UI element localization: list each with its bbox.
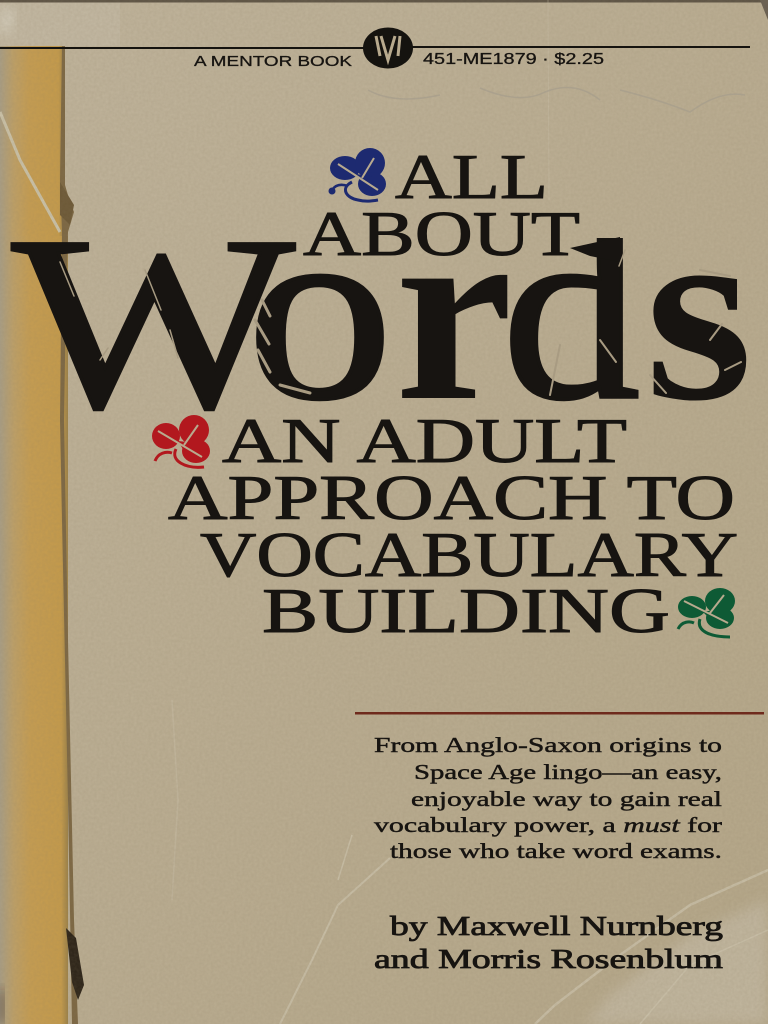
top rule [0, 46, 750, 49]
subtitle [168, 405, 738, 646]
title: Words: d [502, 167, 640, 453]
icon: blue clover [328, 148, 386, 201]
yellow spine strip [0, 46, 84, 1024]
subtitle: VOCABULARY [200, 519, 738, 590]
subtitle: APPROACH TO [168, 462, 735, 533]
title: Words: r [395, 167, 513, 455]
title: all about [303, 141, 580, 269]
subtitle: AN ADULT [222, 405, 627, 476]
title: Words: s [645, 167, 753, 455]
publisher line right: catalogue number and price: 451-ME1879 · $2.25 [423, 51, 604, 68]
blurb: Space Age lingo—an easy, [414, 760, 722, 784]
blurb: those who take word exams. [390, 839, 722, 863]
icon: mentor logo [363, 28, 413, 68]
icon: red clover [152, 415, 210, 467]
wear marks on the title [60, 250, 741, 395]
authors: by Maxwell Nurnberg [390, 910, 723, 941]
title: all about: ALL [395, 141, 548, 212]
blurb: vocabulary power, a must for [374, 813, 722, 837]
blurb: From Anglo-Saxon origins to [374, 733, 722, 757]
worn lighter corner [585, 900, 768, 1024]
authors [374, 910, 723, 974]
red rule [355, 712, 764, 714]
title: Words: o [247, 167, 393, 453]
title: Words [10, 237, 746, 412]
authors: and Morris Rosenblum [374, 943, 723, 974]
handwritten pencil signature [368, 88, 745, 112]
publisher line left: A MENTOR BOOK [194, 54, 352, 70]
subtitle: BUILDING [262, 575, 670, 646]
paper creases [172, 0, 768, 1024]
title: Words: W [12, 185, 295, 460]
blurb: enjoyable way to gain real [411, 787, 722, 811]
blurb [374, 733, 722, 863]
icon: green clover [678, 588, 735, 637]
title: all about: ABOUT [303, 198, 580, 269]
